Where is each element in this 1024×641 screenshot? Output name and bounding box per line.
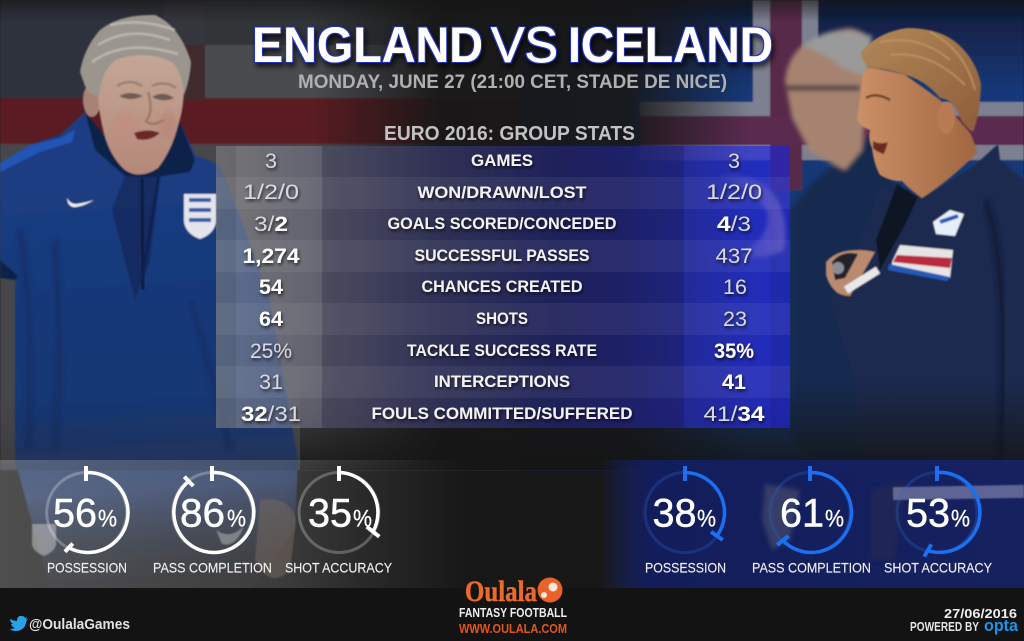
row: passes: SUCCESSFUL PASSES <box>414 246 590 265</box>
row: goals: GOALS SCORED/CONCEDED <box>388 214 616 233</box>
hand and watch <box>826 250 878 296</box>
ring: possession: 56 <box>53 492 97 536</box>
ring: pass completion: 86 <box>180 492 225 536</box>
fade at the bottom of the photos <box>0 380 1024 470</box>
ring: pass completion: 61 <box>780 492 824 536</box>
stats rows <box>241 149 765 426</box>
icon: KSI crest <box>933 210 964 236</box>
row: shots <box>259 307 747 331</box>
row: chances: 16 <box>723 275 747 299</box>
footer band <box>0 588 1024 641</box>
ring: shot accuracy <box>884 466 1024 576</box>
ring: possession <box>47 466 128 576</box>
title <box>252 17 773 73</box>
row: interceptions: 31 <box>259 370 283 394</box>
row: won drawn lost: 1/2/0 <box>243 180 299 204</box>
row: passes: 1,274 <box>242 244 300 268</box>
row: tackles <box>250 339 754 363</box>
row: tackles: 35% <box>714 339 754 363</box>
date and credit: POWERED BY <box>910 620 980 634</box>
photo: Iceland head coach <box>826 28 1024 462</box>
row: fouls: 32/31 <box>241 402 301 426</box>
row: fouls <box>241 402 765 426</box>
title: ICELAND <box>568 17 773 73</box>
date and credit <box>910 606 1019 635</box>
ring: shot accuracy: % <box>951 506 970 532</box>
logo: Oulala fantasy football: Oulala <box>465 575 537 608</box>
row: goals: 3/2 <box>254 212 288 236</box>
ring: possession: 38 <box>652 492 696 536</box>
ring: shot accuracy: 35 <box>308 492 352 536</box>
panel: Iceland stats <box>600 460 1024 588</box>
row: goals <box>254 212 751 236</box>
England flag backdrop <box>0 0 520 470</box>
ring: pass completion: PASS COMPLETION <box>153 560 272 576</box>
date and credit: 27/06/2016 <box>944 606 1017 621</box>
row: won drawn lost <box>243 180 762 204</box>
row: tackles: TACKLE SUCCESS RATE <box>407 341 597 360</box>
row: fouls: FOULS COMMITTED/SUFFERED <box>372 404 632 423</box>
photo: Iceland assistant <box>785 28 900 460</box>
ring: possession: POSSESSION <box>645 560 726 576</box>
stats table backdrop <box>216 146 790 428</box>
row: interceptions: 41 <box>722 370 746 394</box>
ring: possession: POSSESSION <box>47 560 127 576</box>
panel: England stats <box>0 460 470 588</box>
row: passes: 437 <box>716 244 752 268</box>
ghost photo details <box>32 499 296 578</box>
Iceland stripe on chest <box>888 245 953 281</box>
ring: shot accuracy: SHOT ACCURACY <box>884 560 993 576</box>
row: games: GAMES <box>471 151 533 170</box>
row: shots: SHOTS <box>476 309 528 328</box>
row: interceptions <box>259 370 746 394</box>
photo: England manager <box>0 15 298 590</box>
row: interceptions: INTERCEPTIONS <box>434 372 570 391</box>
row: games: 3 <box>265 149 277 173</box>
icon: twitter bird <box>10 616 28 631</box>
row: chances: CHANCES CREATED <box>422 277 582 296</box>
title: VS <box>491 17 558 73</box>
logo: Oulala fantasy football <box>459 575 567 636</box>
logo: Oulala fantasy football: WWW.OULALA.COM <box>459 621 567 636</box>
ring: possession <box>645 466 726 576</box>
title: ENGLAND <box>252 17 483 73</box>
head <box>80 15 191 175</box>
ring: shot accuracy: SHOT ACCURACY <box>285 560 393 576</box>
ring: pass completion: % <box>227 506 246 532</box>
ring: pass completion <box>153 466 272 576</box>
ring: pass completion <box>752 466 871 576</box>
ring: shot accuracy: 53 <box>906 492 950 536</box>
ghost photo details <box>762 480 905 560</box>
row: shots: 64 <box>259 307 283 331</box>
row: tackles: 25% <box>250 339 292 363</box>
row: chances <box>259 275 747 299</box>
ghosted hand <box>716 175 785 257</box>
date and credit: opta <box>984 616 1019 635</box>
row: games <box>265 149 740 173</box>
Iceland flag backdrop <box>520 0 1024 470</box>
subtitle: MONDAY, JUNE 27 (21:00 CET, STADE DE NICE) <box>298 72 727 93</box>
icon: swoosh <box>67 198 94 207</box>
logo: Oulala fantasy football: FANTASY FOOTBALL <box>459 606 567 620</box>
table heading: EURO 2016: GROUP STATS <box>384 123 635 145</box>
ring: pass completion: PASS COMPLETION <box>752 560 871 576</box>
twitter handle: @OulalaGames <box>29 617 130 633</box>
row: won drawn lost: WON/DRAWN/LOST <box>418 183 587 202</box>
ring: shot accuracy <box>285 466 393 576</box>
row: chances: 54 <box>259 275 283 299</box>
row: fouls: 41/34 <box>704 402 765 426</box>
icon: England crest <box>184 194 216 239</box>
row: shots: 23 <box>723 307 747 331</box>
ring: possession: % <box>697 506 716 532</box>
row: goals: 4/3 <box>717 212 751 236</box>
row: passes <box>242 244 752 268</box>
row: won drawn lost: 1/2/0 <box>706 180 762 204</box>
ring: pass completion: % <box>825 506 844 532</box>
row: games: 3 <box>728 149 740 173</box>
ring: shot accuracy: % <box>353 506 372 532</box>
ring: possession: % <box>98 506 117 532</box>
